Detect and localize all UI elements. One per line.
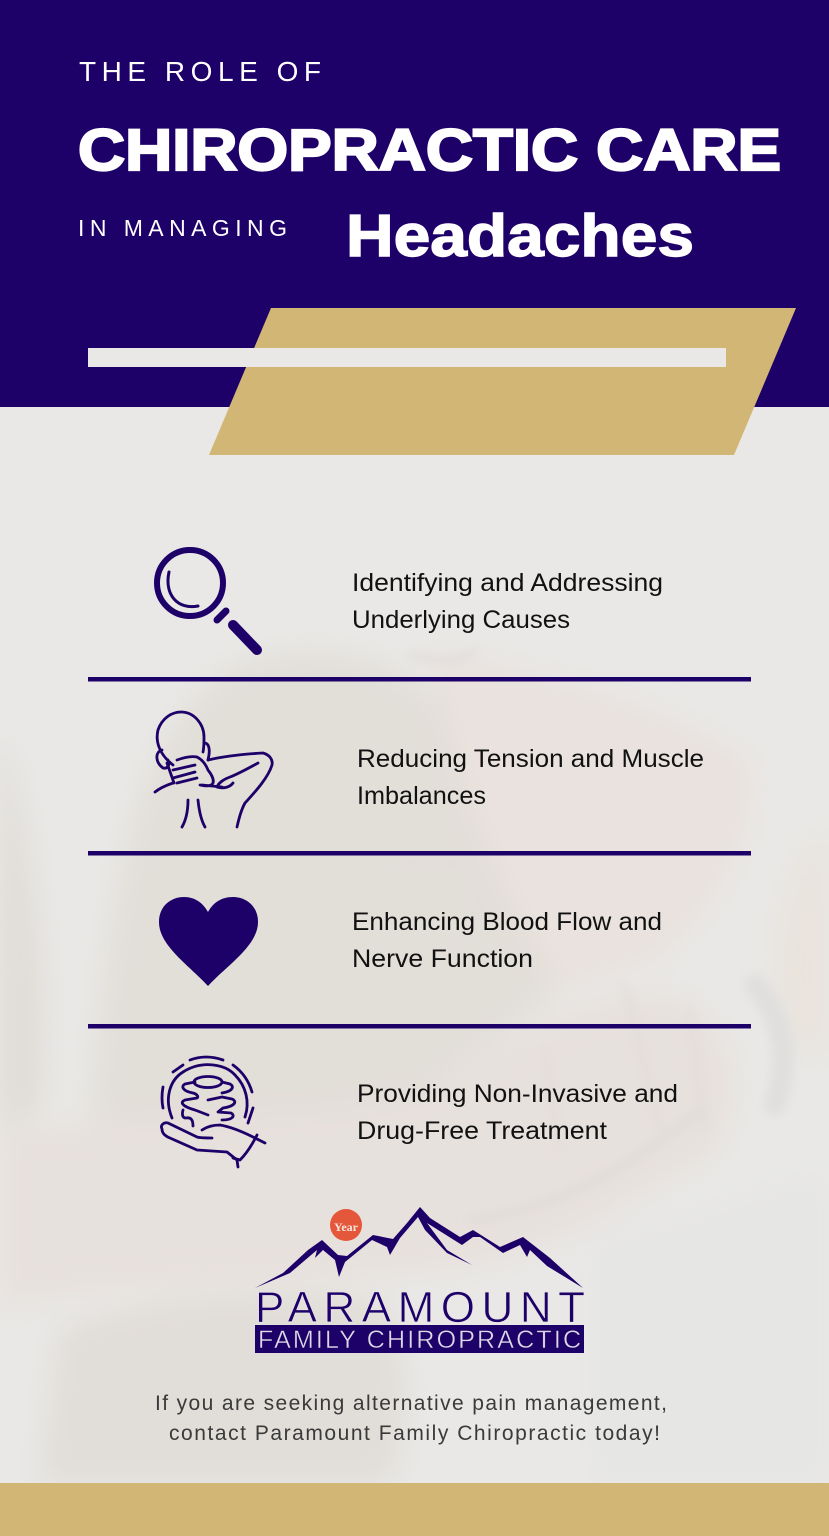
logo: family chiropractic text: FAMILY CHIROPRACTIC (258, 1326, 581, 1354)
hand edge (470, 1110, 700, 1220)
item text: identifying causes: Underlying Causes (352, 606, 570, 634)
fingers (545, 985, 705, 1150)
gold parallelogram (209, 308, 796, 455)
item text: identifying causes: Identifying and Addressing (352, 569, 663, 597)
icon: heart (159, 897, 258, 986)
closing call to action: If you are seeking alternative pain management, (155, 1392, 667, 1415)
heading: the role of: THE ROLE OF (79, 56, 321, 87)
item text: enhancing blood flow: Nerve Function (352, 945, 533, 973)
header band (0, 0, 829, 407)
ear (400, 860, 480, 960)
sleeve (755, 985, 783, 1105)
logo: badge text: Year (334, 1220, 359, 1234)
white bar (88, 348, 726, 367)
logo: paramount wordmark: PARAMOUNT (255, 1283, 585, 1332)
divider 1 (88, 677, 751, 682)
footer band (0, 1483, 829, 1536)
logo: paramount family chiropractic (255, 1207, 585, 1354)
item text: reducing tension: Imbalances (357, 782, 486, 810)
heading: in managing: IN MANAGING (78, 215, 287, 241)
heading: chiropractic care: CHIROPRACTIC CARE (78, 118, 781, 183)
logo: family chiropractic band (255, 1325, 584, 1353)
icon: person holding neck (155, 712, 272, 827)
divider 3 (88, 1024, 751, 1028)
item text: enhancing blood flow: Enhancing Blood Flow and (352, 908, 662, 936)
logo: mountains (255, 1207, 583, 1288)
divider 2 (88, 851, 751, 856)
faded background photo (0, 407, 829, 1487)
closing call to action: contact Paramount Family Chiropractic today! (169, 1422, 660, 1445)
item text: non-invasive: Drug-Free Treatment (357, 1117, 607, 1145)
eye (410, 650, 475, 660)
icon: magnifying glass (157, 550, 257, 650)
item text: reducing tension: Reducing Tension and Muscle (357, 745, 704, 773)
heading: headaches: Headaches (346, 203, 694, 269)
item text: non-invasive: Providing Non-Invasive and (357, 1080, 678, 1108)
logo: red badge (330, 1209, 362, 1241)
icon: hand holding spine (161, 1057, 265, 1167)
